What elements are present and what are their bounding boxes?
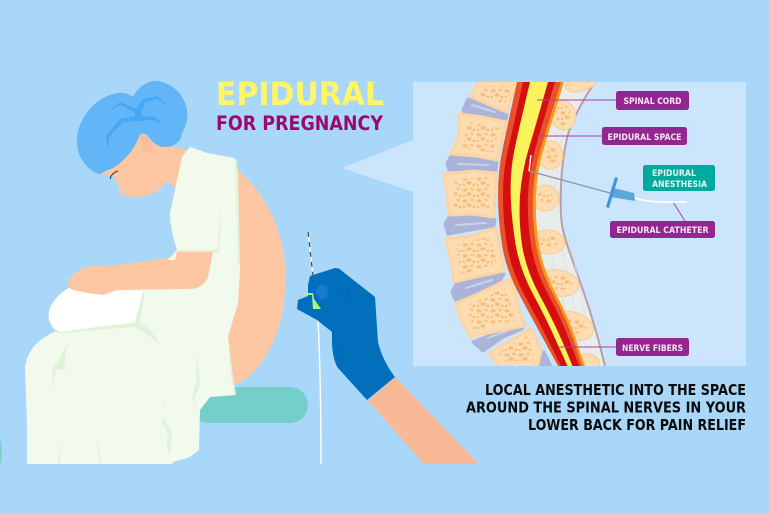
intervertebral discs (445, 99, 551, 366)
gown fold lines (52, 160, 240, 464)
callout pointer (342, 140, 413, 192)
doctor forearm (368, 377, 479, 464)
needle hub (303, 293, 321, 309)
back soft tissue (536, 82, 604, 366)
spinous processes (536, 82, 600, 366)
label: nerve fibers (616, 338, 689, 356)
white pillow on belly (49, 288, 143, 332)
stool seat (190, 387, 308, 423)
label: epidural anesthesia: EPIDURAL (652, 169, 697, 179)
blue glove (297, 268, 395, 400)
hospital gown (25, 147, 240, 464)
doctor hand holding needle (297, 232, 479, 464)
label: epidural space (602, 127, 687, 145)
vertebrae (444, 81, 541, 368)
patient bare back (222, 160, 285, 385)
label: epidural anesthesia (643, 165, 715, 191)
label: epidural catheter: EPIDURAL CATHETER (616, 226, 709, 236)
label leader lines (537, 100, 685, 347)
illustration: seated pregnant patient (25, 81, 285, 464)
spinal canal (498, 82, 585, 366)
epidural needle and catheter (529, 155, 687, 208)
subtitle: for pregnancy: FOR PREGNANCY (216, 112, 384, 135)
surgical cap (77, 81, 187, 174)
label: spinal cord (616, 91, 689, 110)
label: epidural space: EPIDURAL SPACE (608, 133, 682, 143)
panel: spine cross-section (413, 73, 746, 373)
label: epidural anesthesia: ANESTHESIA (652, 180, 707, 190)
description text block (466, 381, 746, 434)
label: spinal cord: SPINAL CORD (624, 97, 682, 107)
patient arm and hand (68, 252, 213, 295)
title (216, 75, 384, 135)
title line: epidural: EPIDURAL (216, 75, 384, 113)
label: nerve fibers: NERVE FIBERS (622, 344, 683, 354)
label: epidural catheter (610, 221, 715, 238)
spine anatomy (444, 73, 605, 373)
patient head and neck (100, 135, 192, 197)
vertebra bone texture (454, 86, 535, 362)
closed eye (110, 171, 118, 179)
needle and catheter (308, 232, 321, 464)
ear (140, 134, 153, 153)
